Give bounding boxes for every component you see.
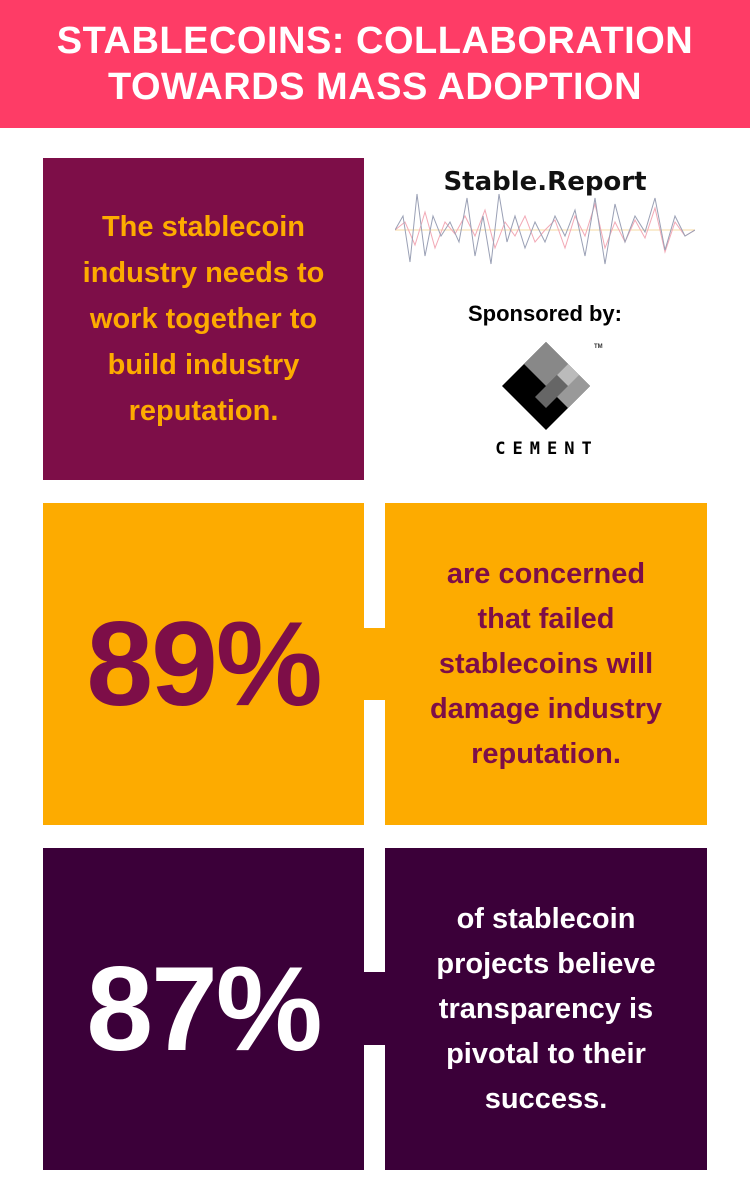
description text — [385, 848, 707, 1170]
big number 89% — [43, 503, 364, 825]
logo: Stable.Report: Stable.Report — [443, 167, 647, 197]
description text: damage industry — [430, 692, 662, 724]
panel: 87% stat — [43, 848, 707, 1170]
description text: reputation. — [471, 738, 621, 770]
logo: Cement — [495, 342, 603, 459]
description text — [385, 503, 707, 825]
description text: transparency is — [439, 992, 653, 1024]
description text: that failed — [478, 602, 614, 634]
header banner: TOWARDS MASS ADOPTION — [108, 66, 642, 108]
big number 89%: 89% — [86, 597, 321, 731]
logo: Cement: CEMENT — [495, 439, 599, 459]
description text: are concerned — [447, 558, 645, 590]
header banner — [0, 0, 750, 128]
big number 87%: 87% — [86, 942, 321, 1076]
description text: stablecoins will — [439, 648, 653, 680]
description text: projects believe — [436, 948, 656, 980]
logo: Stable.Report — [395, 167, 695, 264]
panel: 89% stat — [43, 503, 707, 825]
connector — [353, 628, 393, 700]
description text: of stablecoin — [457, 902, 635, 934]
panel: intro statement: reputation. — [129, 395, 278, 427]
panel: intro statement: build industry — [108, 349, 299, 381]
sponsored by label: Sponsored by: — [468, 301, 622, 326]
description text: success. — [485, 1082, 607, 1114]
panel: intro statement: The stablecoin — [102, 211, 305, 243]
panel: intro statement: work together to — [90, 303, 317, 335]
header banner: STABLECOINS: COLLABORATION — [57, 20, 693, 62]
panel: intro statement: industry needs to — [83, 257, 324, 289]
logo: Cement: TM — [594, 344, 603, 350]
big number 87% — [43, 848, 364, 1170]
panel: intro statement — [43, 158, 364, 480]
connector — [353, 972, 393, 1045]
description text: pivotal to their — [446, 1038, 646, 1070]
